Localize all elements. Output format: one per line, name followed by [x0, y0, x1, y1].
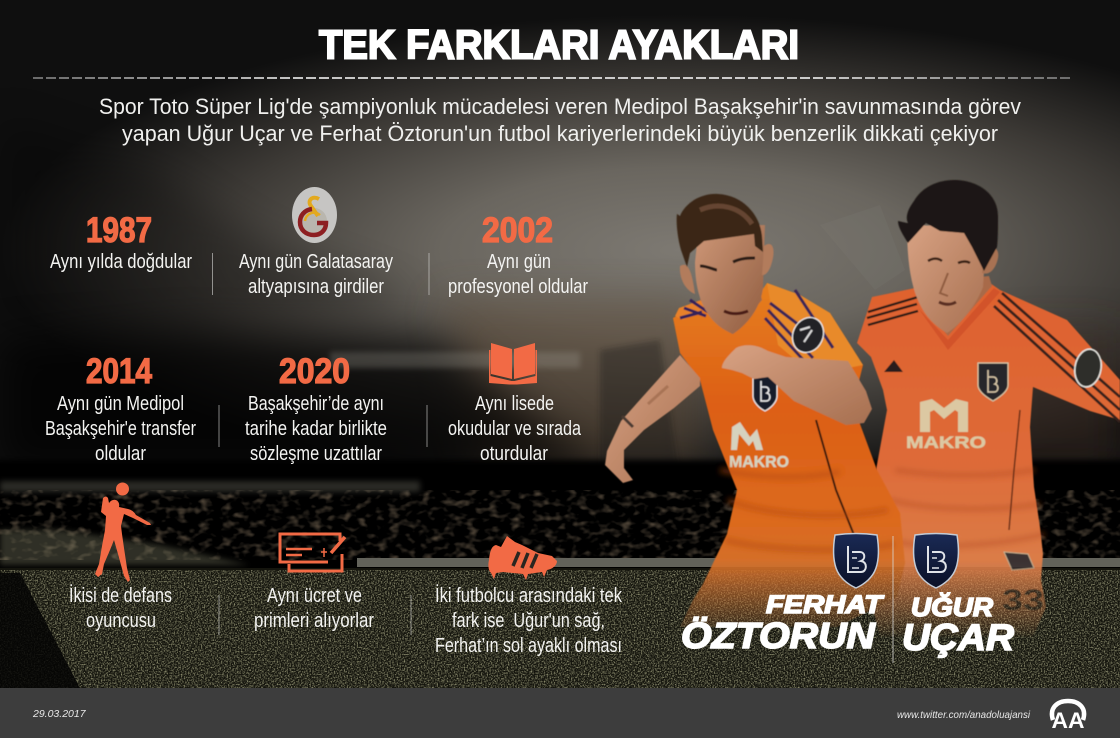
player name: Uğur Uçar: UĞUR [911, 592, 993, 622]
icon: player heading ball [95, 482, 151, 582]
icon: cheque and pen [280, 534, 345, 571]
sponsor: Makro [729, 422, 789, 471]
item: 2014: oldular [95, 443, 146, 465]
sponsor: Makro: MAKRO [729, 454, 789, 471]
crest: Uğur [914, 534, 958, 588]
item: 2014: 2014 [86, 352, 152, 391]
item: same pay: Aynı ücret ve [267, 585, 362, 607]
intro text [99, 94, 1021, 146]
item: 2002 [448, 211, 588, 298]
item: 1987 [50, 211, 192, 273]
icon: football boot [488, 536, 557, 580]
title: TEK FARKLARI AYAKLARI [319, 22, 799, 68]
item: 2002: profesyonel oldular [448, 276, 588, 298]
player: Ferhat Öztorun [605, 194, 905, 627]
item: 2020: Başakşehir’de aynı [248, 393, 384, 415]
player name: Ferhat Öztorun: FERHAT [766, 591, 885, 619]
item: 1987: 1987 [86, 211, 152, 250]
item: 2014: Başakşehir'e transfer [45, 418, 196, 440]
item: Galatasaray: altyapısına girdiler [248, 276, 384, 298]
intro text: yapan Uğur Uçar ve Ferhat Öztorun'un futbol kariyerlerindeki büyük benzerlik dikkati çekiyor [122, 121, 998, 146]
item: same pay: primleri alıyorlar [254, 610, 374, 632]
item: left and right foot [435, 536, 623, 657]
item: left and right foot: Ferhat’ın sol ayaklı olması [435, 635, 622, 657]
item: 2002: Aynı gün [487, 251, 551, 273]
item: defenders: oyuncusu [86, 610, 156, 632]
footer bar [0, 688, 1120, 738]
item: 2014: Aynı gün Medipol [57, 393, 184, 415]
player: Uğur Uçar: 33 [1002, 584, 1044, 617]
sponsor: Makro: MAKRO [906, 433, 986, 452]
intro text: Spor Toto Süper Lig'de şampiyonluk mücadelesi veren Medipol Başakşehir'in savunmasında görev [99, 94, 1021, 119]
item: 2002: 2002 [482, 211, 553, 250]
player name: Uğur Uçar [902, 592, 1014, 658]
item: same high school [448, 343, 582, 465]
item: same high school: oturdular [480, 443, 548, 465]
item: 1987: Aynı yılda doğdular [50, 251, 192, 273]
item: left and right foot: İki futbolcu arasındaki tek [435, 584, 623, 607]
item: same high school: okudular ve sırada [448, 418, 582, 440]
icon: open book [489, 343, 537, 384]
player: Uğur Uçar [857, 180, 1120, 637]
crest: Ferhat [834, 534, 878, 588]
item: 2020: tarihe kadar birlikte [245, 418, 387, 440]
date: 29.03.2017 [32, 708, 87, 720]
item: same pay [254, 534, 374, 632]
item: defenders: İkisi de defans [69, 584, 172, 607]
player name: Ferhat Öztorun [681, 591, 885, 656]
icon: Galatasaray crest [292, 187, 337, 243]
sponsor: Makro [906, 399, 986, 452]
item: 2020 [245, 352, 387, 465]
item: 2020: sözleşme uzattılar [250, 443, 382, 465]
item: 2020: 2020 [279, 352, 350, 391]
item: same high school: Aynı lisede [475, 393, 554, 415]
player name: Ferhat Öztorun: ÖZTORUN [681, 615, 876, 656]
item: Galatasaray: Aynı gün Galatasaray [239, 251, 393, 273]
logo: Anadolu Agency: AA [1052, 708, 1085, 733]
item: left and right foot: fark ise Uğur'un sağ, [452, 610, 605, 632]
photo: players [605, 180, 1120, 637]
twitter url: www.twitter.com/anadoluajansi [897, 709, 1031, 721]
item: Galatasaray [239, 187, 393, 298]
item: defenders [69, 482, 172, 632]
player name: Uğur Uçar: UÇAR [902, 617, 1014, 658]
item: 2014 [45, 352, 196, 465]
